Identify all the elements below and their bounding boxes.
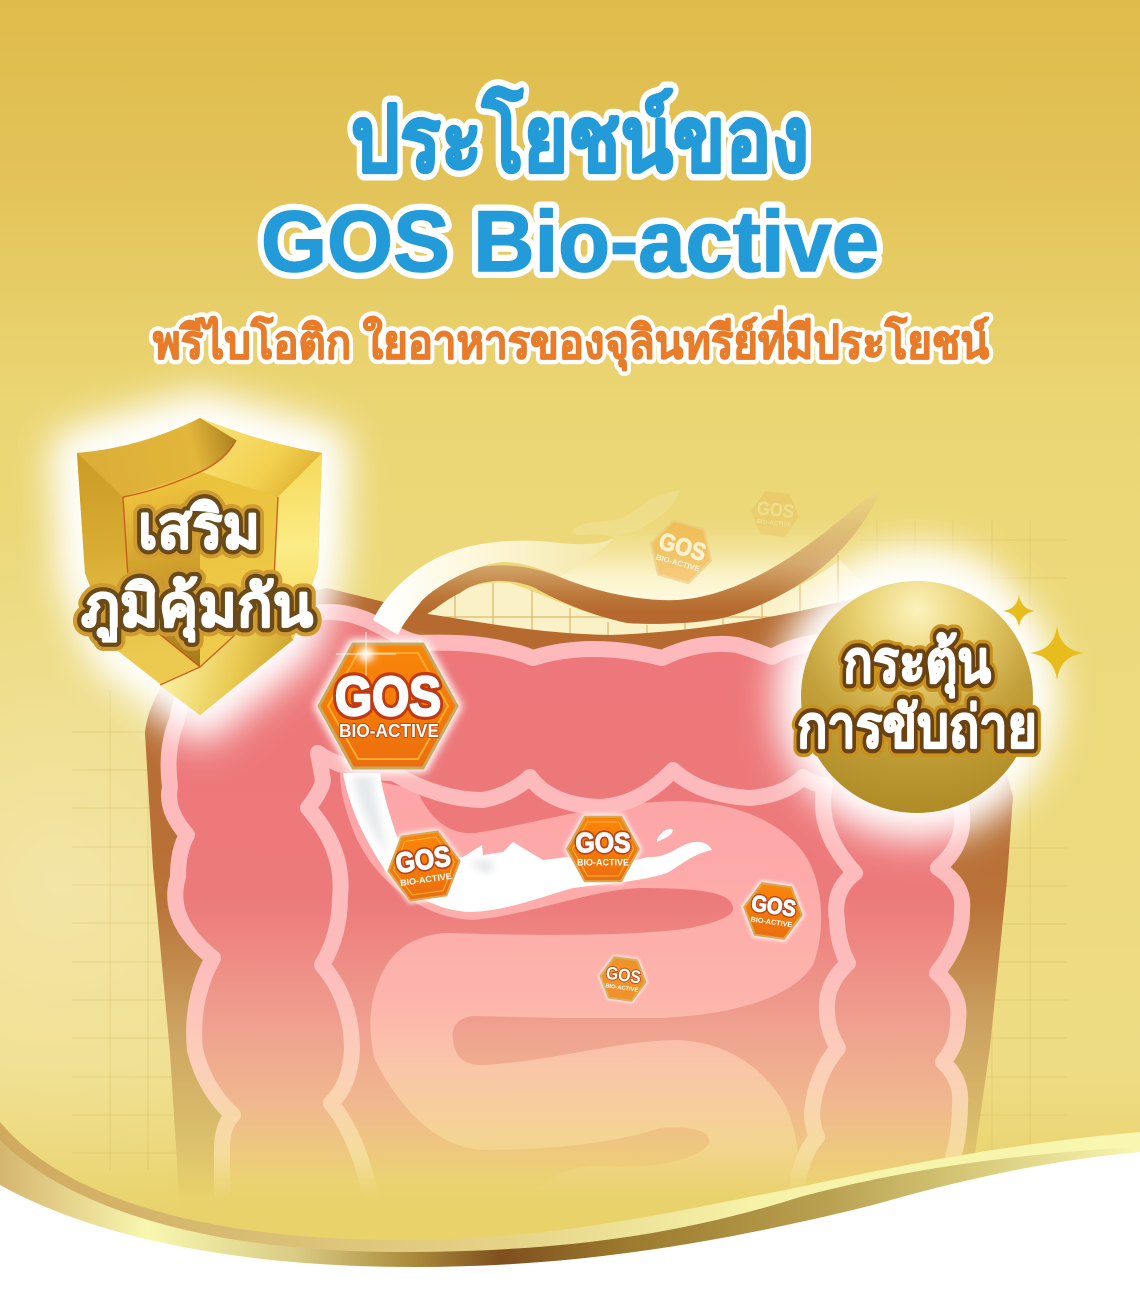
pocket between tube and colon <box>428 560 880 635</box>
hexagon: small 1: GOS <box>394 840 453 879</box>
hexagon: main GOS badge: GOS <box>335 665 441 727</box>
coin: stimulate excretion <box>792 581 1041 813</box>
white esophagus arc <box>373 538 613 635</box>
hexagon: small 4 <box>598 956 648 1002</box>
shield facets <box>77 418 322 715</box>
tube interior glow <box>555 470 880 604</box>
subtitle: พรีไบโอติก ใยอาหารของจุลินทรีย์ที่มีประโยชน์ <box>153 310 990 371</box>
shield label: ภูมิคุ้มกัน <box>81 574 313 643</box>
coin label: การขับถ่าย <box>797 695 1037 760</box>
hexagon: main GOS badge <box>319 632 457 768</box>
title line 1: ประโยชน์ของ <box>351 86 809 191</box>
subtitle: พรีไบโอติก ใยอาหารของจุลินทรีย์ที่มีประโยชน์ <box>153 310 990 371</box>
hexagon: faint top small <box>749 490 801 538</box>
glow around coin <box>775 555 1059 839</box>
milk stream <box>343 773 712 912</box>
small intestine light tube <box>340 773 821 1205</box>
hexagon: faint top small: GOS <box>756 498 795 523</box>
shield label: ภูมิคุ้มกัน <box>81 574 313 643</box>
hexagon: faint top large: GOS <box>656 528 709 567</box>
coin label: กระตุ้น <box>843 630 991 699</box>
hexagon: small 3: GOS <box>750 890 798 922</box>
intestine pink fill <box>169 612 962 1205</box>
hexagon: main GOS badge: BIO-ACTIVE <box>339 721 439 741</box>
glow around shield <box>77 418 322 715</box>
hexagon: small 2: GOS <box>575 827 631 858</box>
shield icon: immunity <box>77 418 322 715</box>
coin label: กระตุ้น <box>843 630 991 699</box>
hexagon: small 3: GOS <box>750 890 798 922</box>
hexagon: small 1: BIO-ACTIVE <box>399 871 452 888</box>
shield label: เสริม <box>138 494 260 561</box>
soft cream behind coin <box>830 542 1000 638</box>
intestine <box>145 588 1013 1210</box>
hexagon: faint top large: BIO-ACTIVE <box>655 552 701 574</box>
shield label: ภูมิคุ้มกัน <box>81 574 313 643</box>
brown tube wall <box>398 488 882 640</box>
coin label <box>797 630 1037 760</box>
hexagon: small 4: BIO-ACTIVE <box>605 983 639 994</box>
shield label <box>81 494 313 643</box>
upper digestive tube <box>398 470 1000 640</box>
hexagon: faint top small: BIO-ACTIVE <box>756 519 792 529</box>
intestine outer brown wall <box>145 588 1013 1210</box>
milk trace, faint <box>572 490 680 537</box>
hexagon: main GOS badge: GOS <box>335 665 441 727</box>
hexagon: small 4: GOS <box>605 963 642 987</box>
shield label: เสริม <box>138 494 260 561</box>
colon walls <box>169 612 962 1205</box>
coin label: กระตุ้น <box>843 630 991 699</box>
hexagon: small 3 <box>741 881 805 941</box>
hexagon: small 2: GOS <box>575 827 631 858</box>
white footer <box>0 1152 1140 1300</box>
icon: sparkle large <box>1030 626 1084 680</box>
icon: sparkle small <box>1003 595 1035 627</box>
title <box>261 86 879 290</box>
hexagon: small 2 <box>567 817 639 881</box>
title line 1: ประโยชน์ของ <box>351 86 809 191</box>
hexagon: small 1 <box>384 829 464 903</box>
hexagon: small 1: GOS <box>394 840 453 879</box>
sparkle glows <box>77 418 1059 839</box>
title line 2: GOS Bio-active <box>261 194 879 290</box>
bottom gold wave <box>0 1122 1140 1300</box>
title line 2: GOS Bio-active <box>261 194 879 290</box>
hexagon: small 3: BIO-ACTIVE <box>750 915 793 929</box>
shield label: เสริม <box>138 494 260 561</box>
hexagon: faint top large <box>643 517 719 587</box>
coin label: การขับถ่าย <box>797 695 1037 760</box>
hexagon: small 2: BIO-ACTIVE <box>577 858 629 868</box>
coin label: การขับถ่าย <box>797 695 1037 760</box>
